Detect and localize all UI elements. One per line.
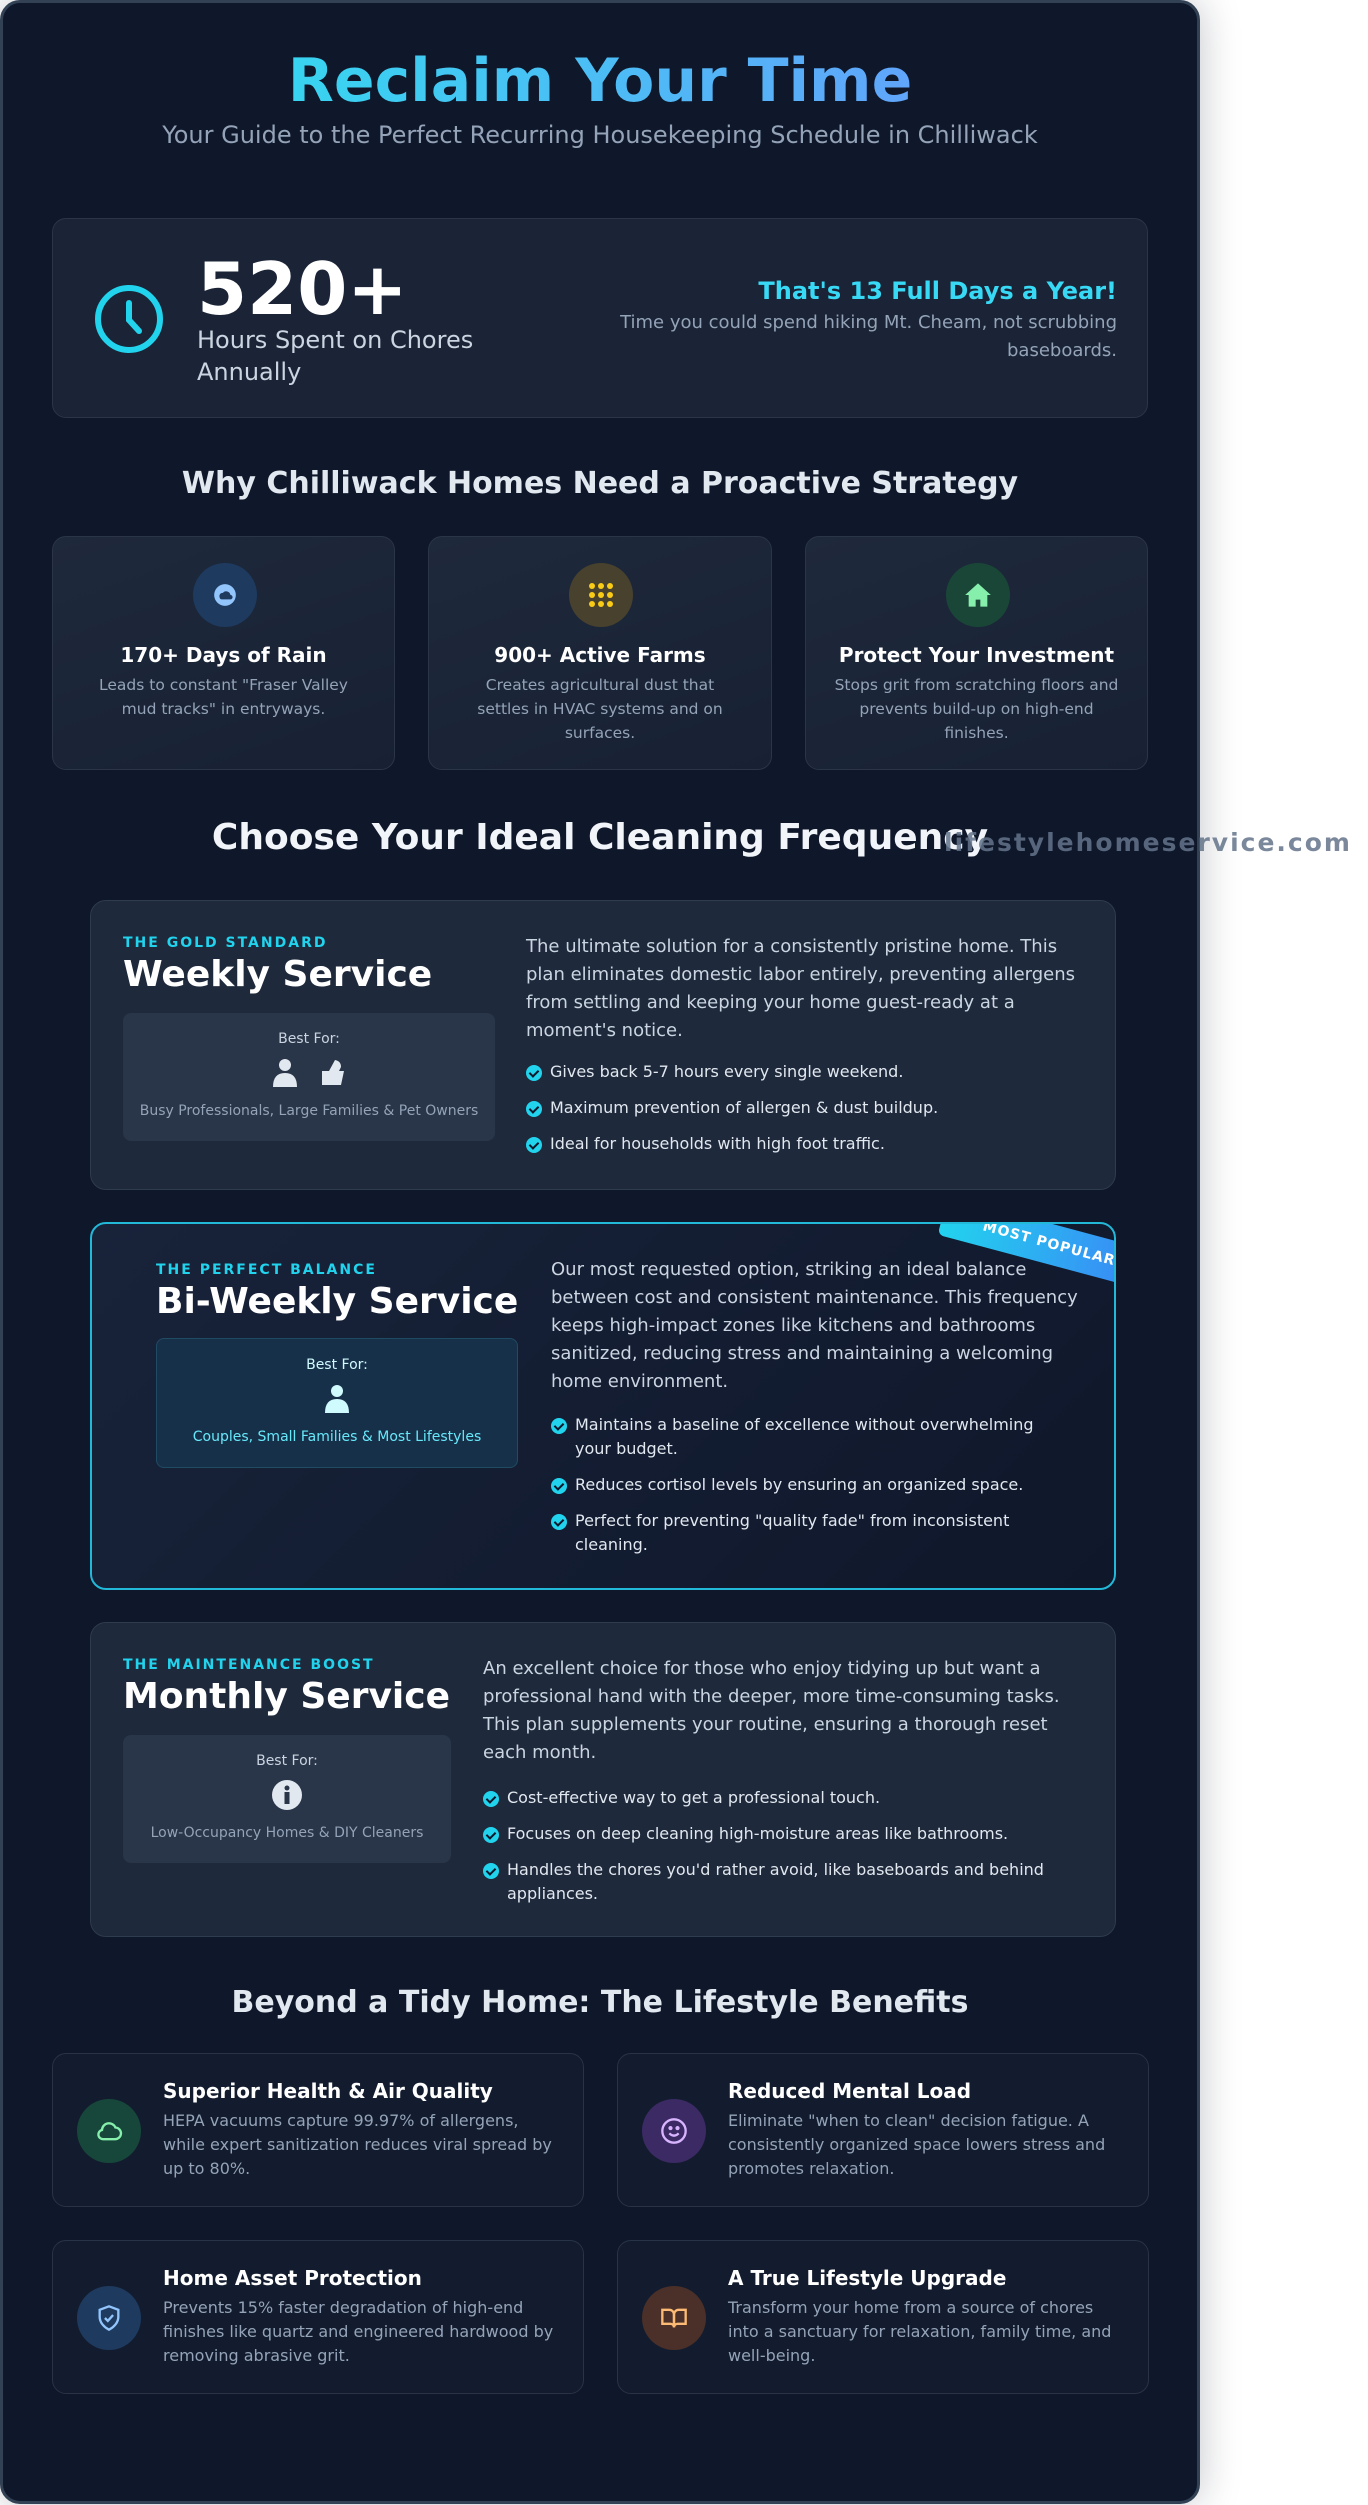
subtitle: Your Guide to the Perfect Recurring Housekeeping Schedule in Chilliwack: [162, 121, 1038, 149]
benefit: mental: Reduced Mental Load: [728, 2079, 971, 2103]
best for box: Best For:: [256, 1753, 318, 1769]
bullets: Reduces cortisol levels by ensuring an organized space.: [575, 1475, 1023, 1494]
panel: farms: [428, 536, 772, 770]
stat callout: That's 13 Full Days a Year!: [758, 277, 1117, 305]
plan: bi-weekly: Our most requested option, striking an ideal balance between cost and consistent maintenance. This frequency keeps high-impact zones like kitchens and bathrooms sanitized, reducing stress and maintaining a welcoming home environment.: [551, 1259, 1078, 1392]
plan: bi-weekly: THE PERFECT BALANCE: [156, 1262, 377, 1278]
stats panel: [52, 218, 1148, 418]
plan: monthly: THE MAINTENANCE BOOST: [123, 1657, 375, 1673]
panel: investment: Protect Your Investment: [839, 643, 1114, 667]
plan: bi-weekly: [90, 1222, 1116, 1590]
stat number: 520+: [197, 247, 408, 331]
plan: weekly: The ultimate solution for a consistently pristine home. This plan eliminates domestic labor entirely, preventing allergens from settling and keeping your home guest-ready at a moment's notice.: [526, 936, 1075, 1041]
ribbon: most popular: [938, 1196, 1161, 1292]
icon: clock: [95, 285, 163, 353]
plan: weekly: Maximum prevention of allergen & dust buildup.: [550, 1098, 938, 1117]
benefit: lifestyle: A True Lifestyle Upgrade: [728, 2266, 1006, 2290]
plan: monthly: An excellent choice for those who enjoy tidying up but want a professional hand with the deeper, more time-consuming tasks. This plan supplements your routine, ensuring a thorough reset each month.: [483, 1658, 1060, 1763]
stat label: Hours Spent on Chores Annually: [197, 326, 473, 386]
icon: cloud: [77, 2099, 141, 2163]
panel: farms: 900+ Active Farms: [494, 643, 706, 667]
bullets: [551, 1415, 1034, 1554]
best for box: [123, 1013, 495, 1141]
icon: house: [946, 563, 1010, 627]
plan: weekly: [90, 900, 1116, 1190]
benefit: health: [52, 2053, 584, 2207]
title: Reclaim Your Time: [288, 46, 912, 116]
plan: monthly: [90, 1622, 1116, 1937]
benefit: lifestyle: Transform your home from a source of chores into a sanctuary for relaxation, family time, and well-being.: [728, 2298, 1111, 2365]
panel: rain: [52, 536, 395, 770]
plan: weekly: Weekly Service: [123, 954, 432, 995]
stat callout: Time you could spend hiking Mt. Cheam, not scrubbing baseboards.: [620, 312, 1117, 361]
benefit: health: HEPA vacuums capture 99.97% of allergens, while expert sanitization reduces viral spread by up to 80%.: [163, 2111, 552, 2178]
best for box: Busy Professionals, Large Families & Pet Owners: [140, 1103, 478, 1119]
benefit: mental: [617, 2053, 1149, 2207]
watermark: lifestylehomeservice.com: [944, 828, 1352, 857]
bullets: Handles the chores you'd rather avoid, like baseboards and behind appliances.: [507, 1860, 1044, 1903]
bullets: Cost-effective way to get a professional touch.: [507, 1788, 880, 1807]
plan: monthly: Monthly Service: [123, 1676, 450, 1717]
icon: smile: [642, 2099, 706, 2163]
benefit: asset: Prevents 15% faster degradation of high-end finishes like quartz and engineered hardwood by removing abrasive grit.: [163, 2298, 553, 2365]
bullets: [483, 1788, 1044, 1903]
heading: why: Why Chilliwack Homes Need a Proactive Strategy: [182, 466, 1018, 501]
panel: farms: Creates agricultural dust that settles in HVAC systems and on surfaces.: [477, 676, 723, 742]
icon: book: [642, 2286, 706, 2350]
benefit: asset: Home Asset Protection: [163, 2266, 422, 2290]
best for box: Couples, Small Families & Most Lifestyles: [193, 1429, 481, 1445]
plan: weekly: Gives back 5-7 hours every single weekend.: [550, 1062, 903, 1081]
panel: investment: Stops grit from scratching floors and prevents build-up on high-end finishes.: [835, 676, 1118, 742]
bullets: Maintains a baseline of excellence without overwhelming your budget.: [575, 1415, 1034, 1458]
plan: weekly: THE GOLD STANDARD: [123, 935, 327, 951]
bullets: Focuses on deep cleaning high-moisture areas like bathrooms.: [507, 1824, 1008, 1843]
stat callout: [620, 277, 1117, 361]
best for box: Best For:: [306, 1357, 368, 1373]
benefit: mental: Eliminate "when to clean" decision fatigue. A consistently organized space lowers stress and promotes relaxation.: [728, 2111, 1105, 2178]
best for box: Low-Occupancy Homes & DIY Cleaners: [151, 1825, 423, 1841]
heading: benefits: Beyond a Tidy Home: The Lifestyle Benefits: [232, 1985, 968, 2020]
best for box: [123, 1735, 451, 1863]
best for box: Best For:: [278, 1031, 340, 1047]
panel: rain: 170+ Days of Rain: [120, 643, 327, 667]
benefit: asset: [52, 2240, 584, 2394]
bullets: Perfect for preventing "quality fade" from inconsistent cleaning.: [575, 1511, 1009, 1554]
bullets: [526, 1062, 938, 1153]
plan: weekly: Ideal for households with high foot traffic.: [550, 1134, 885, 1153]
panel: investment: [805, 536, 1148, 770]
icon: cloud rain: [193, 563, 257, 627]
benefit: lifestyle: [617, 2240, 1149, 2394]
best for box: [156, 1338, 518, 1468]
panel: rain: Leads to constant "Fraser Valley mud tracks" in entryways.: [99, 676, 348, 718]
icon: dots grid: [569, 563, 633, 627]
heading: frequency: Choose Your Ideal Cleaning Frequency: [212, 817, 988, 858]
plan: bi-weekly: Bi-Weekly Service: [156, 1281, 518, 1322]
benefit: health: Superior Health & Air Quality: [163, 2079, 493, 2103]
icon: shield: [77, 2286, 141, 2350]
